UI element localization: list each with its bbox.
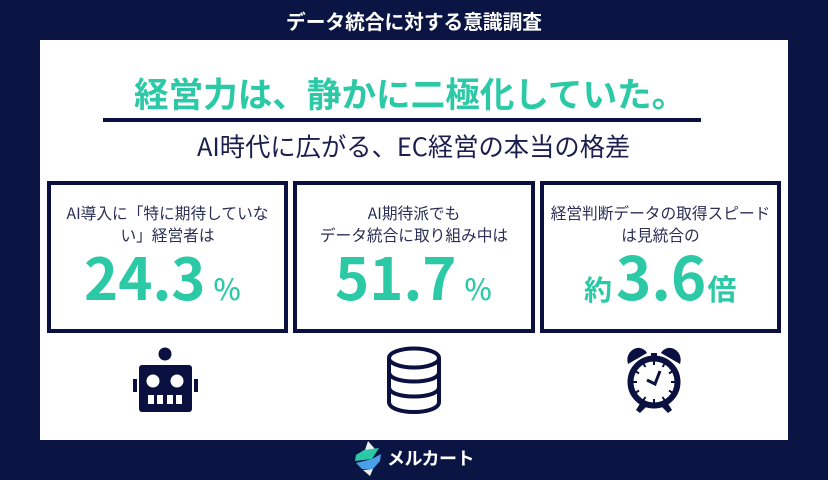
icon: alarm clock <box>627 348 681 413</box>
card label: AI導入に「特に期待していな <box>67 201 268 224</box>
card label <box>320 201 508 246</box>
card label: い」経営者は <box>120 223 215 246</box>
card: AI expectations <box>47 181 288 333</box>
logo wordmark: メルカート <box>387 445 474 471</box>
logo: Merucart <box>355 441 474 476</box>
subtitle: AI時代に広がる、EC経営の本当の格差 <box>197 128 630 164</box>
card label: は見統合の <box>621 223 700 246</box>
main heading: 経営力は、静かに二極化していた。 <box>134 67 686 117</box>
heading rule <box>103 118 701 122</box>
logo mark <box>355 441 381 476</box>
icon: robot <box>133 348 198 412</box>
card label <box>66 201 268 246</box>
card label: データ統合に取り組み中は <box>320 223 508 246</box>
card value: 24.3 % <box>84 233 241 317</box>
card: data integration <box>293 181 535 333</box>
header title: データ統合に対する意識調査 <box>286 6 542 35</box>
card: decision speed <box>540 181 781 333</box>
white content panel <box>40 40 788 440</box>
card label: AI期待派でも <box>368 201 460 224</box>
card value: 約3.6倍 <box>584 231 736 318</box>
card value: 51.7 % <box>335 233 492 317</box>
card label <box>551 201 770 246</box>
card label: 経営判断データの取得スピード <box>551 201 770 224</box>
icon: database <box>387 346 441 414</box>
